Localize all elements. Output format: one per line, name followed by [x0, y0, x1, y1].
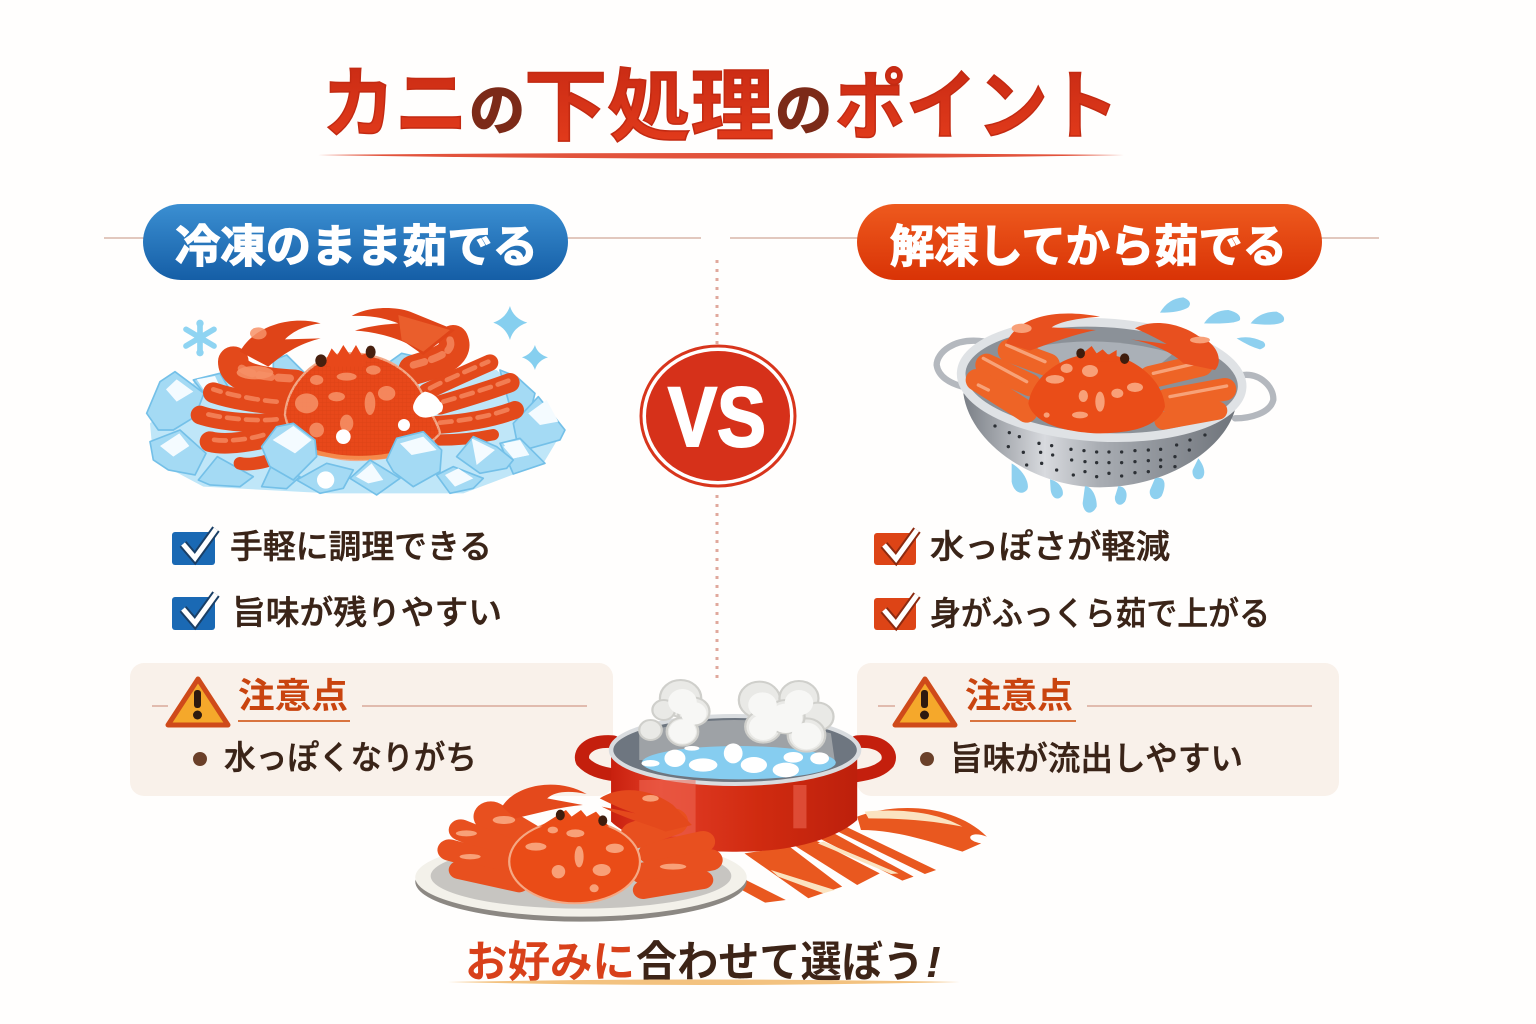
- crab claws: [240, 308, 455, 367]
- crab shell: [285, 353, 440, 460]
- VS badge: [641, 346, 795, 486]
- dotted centre divider: [716, 260, 718, 682]
- pattern highlight: [771, 810, 962, 893]
- white cube faces: [160, 376, 558, 458]
- caution heading: 注意点: [238, 677, 348, 716]
- illustration: crab on ice: [147, 306, 565, 495]
- title: の: [775, 79, 832, 142]
- caution panel: left: [130, 663, 613, 796]
- footer underline: [448, 980, 960, 985]
- crab legs: [200, 340, 515, 464]
- ice cubes behind crab: [147, 353, 565, 493]
- icon: warning: [895, 679, 955, 725]
- text: merit 1: 手軽に調理できる: [230, 528, 492, 565]
- illustration: boiling pot and crab on plate: [415, 680, 987, 922]
- footer message: お好みに: [465, 939, 635, 987]
- icon: check: [172, 594, 216, 630]
- colander rim and interior: [958, 315, 1245, 445]
- icon: check: [874, 595, 917, 630]
- colander handles: [937, 341, 1273, 418]
- crab legs: [449, 817, 711, 890]
- title: カニ: [322, 60, 468, 148]
- pot rim and interior: [611, 716, 859, 784]
- white front cube faces: [273, 426, 529, 487]
- heading pill: frozen: [143, 204, 568, 280]
- pot highlights: [639, 780, 806, 837]
- heading pill: frozen: 冷凍のまま茹でる: [175, 221, 538, 272]
- crab shell: [1028, 353, 1165, 433]
- caution panel: right: [857, 663, 1339, 796]
- crab eyes: [315, 346, 376, 367]
- heading pill: thawed: 解凍してから茹でる: [890, 221, 1287, 272]
- crab shell: [509, 820, 640, 903]
- checklist: frozen: [172, 528, 502, 631]
- crab legs: [977, 351, 1225, 421]
- shell highlights: [237, 327, 395, 437]
- checklist: thawed: [874, 528, 1270, 632]
- caution text: 旨味が流出しやすい: [950, 740, 1243, 777]
- claw texture: [398, 315, 450, 352]
- VS badge: VS: [668, 370, 766, 464]
- icon: check: [874, 530, 917, 565]
- caution text: 水っぽくなりがち: [224, 739, 477, 776]
- crab eyes: [556, 810, 607, 826]
- text: merit 1: 水っぽさが軽減: [930, 528, 1170, 565]
- icon: check: [172, 529, 216, 565]
- footer message: [465, 938, 941, 987]
- title: 下処理: [524, 62, 774, 151]
- pot handles: [582, 742, 889, 776]
- illustration: crab in colander: [937, 297, 1284, 513]
- shell highlights: [1012, 324, 1210, 418]
- icon: snowflake: [186, 320, 214, 356]
- text: merit 2: 旨味が残りやすい: [232, 594, 502, 631]
- title: ポイント: [835, 65, 1119, 150]
- ice cubes in front: [262, 423, 513, 495]
- pot body: [611, 753, 857, 852]
- icon: warning: [168, 679, 228, 725]
- plate: [415, 842, 747, 922]
- title: の: [469, 79, 525, 142]
- heading pill: thawed: [857, 204, 1322, 280]
- icon: sparkles: [493, 306, 548, 370]
- colander bowl: [963, 393, 1235, 487]
- title underline: [318, 153, 1124, 158]
- ice base: [150, 370, 563, 493]
- crab claws: [502, 785, 692, 832]
- leg highlights: [978, 345, 1227, 397]
- colander holes: [993, 424, 1207, 478]
- shell highlights: [456, 795, 686, 892]
- crab claws: [1006, 313, 1219, 370]
- spilled crab pattern: [739, 808, 987, 903]
- footer message: !: [926, 938, 941, 987]
- footer message: 合わせて選ぼう: [636, 939, 924, 987]
- snow bits: [317, 392, 443, 489]
- caution heading: 注意点: [965, 677, 1073, 716]
- crab eyes: [1076, 348, 1129, 364]
- text: merit 2: 身がふっくら茹で上がる: [930, 595, 1270, 632]
- leg highlights: [202, 340, 513, 441]
- bubbles: [641, 743, 829, 777]
- steam clouds: [639, 680, 834, 752]
- water: [642, 746, 836, 779]
- divider lines: [104, 237, 1379, 239]
- water drops: [1012, 297, 1284, 513]
- title: [322, 60, 1119, 151]
